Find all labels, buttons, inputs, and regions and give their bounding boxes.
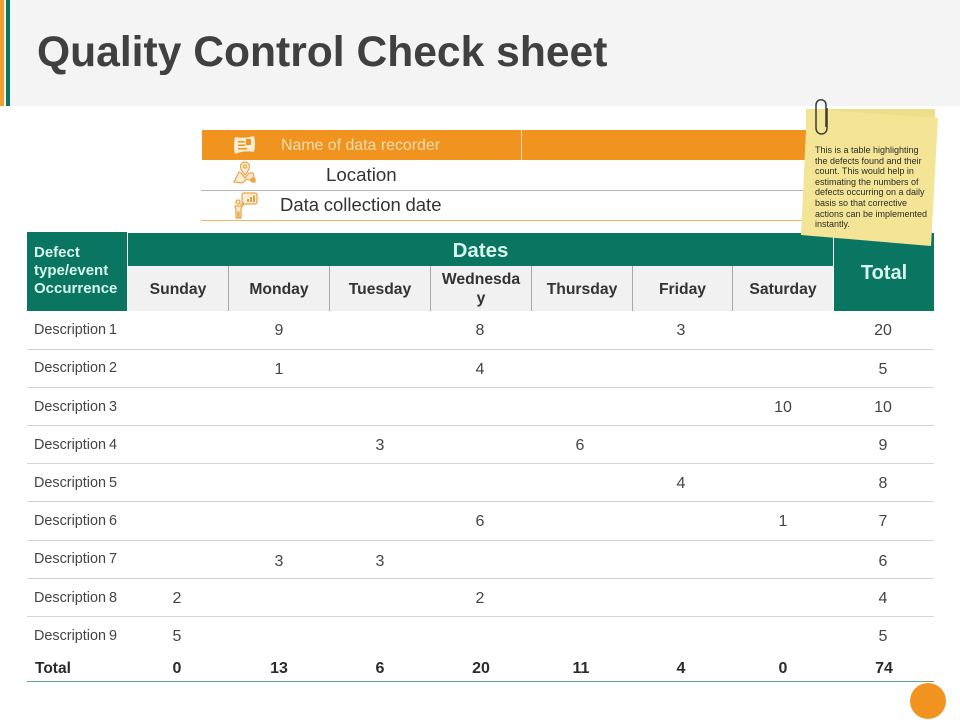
page number circle	[910, 683, 946, 719]
day: tuesday	[330, 266, 431, 311]
accent bar: green	[6, 0, 10, 106]
day: wednesday	[431, 266, 532, 311]
row 9: 5	[879, 628, 887, 645]
accent bar: orange	[0, 0, 4, 106]
bottom line	[201, 220, 841, 221]
header cell: dates	[128, 233, 833, 266]
row 7: 3	[275, 553, 283, 570]
totals row: 0	[173, 660, 181, 677]
totals row: 4	[677, 660, 685, 677]
row 5	[34, 475, 887, 492]
row 8: 4	[879, 590, 887, 607]
orange row	[202, 130, 841, 160]
row 2: Description 2	[34, 360, 117, 376]
day: wednesday: Wednesda	[442, 271, 520, 288]
header cell: dates: Dates	[453, 239, 508, 262]
header band	[0, 0, 960, 106]
row 3: 10	[774, 399, 792, 416]
icon: paperclip	[815, 99, 828, 135]
icon: presenter	[234, 192, 258, 219]
row 8: 2	[173, 590, 181, 607]
row 3: Description 3	[34, 399, 117, 415]
row 3: 10	[874, 399, 892, 416]
day: sunday: Sunday	[150, 281, 206, 298]
icon: map pin	[233, 161, 256, 184]
row 1: 9	[275, 322, 283, 339]
totals row: 6	[376, 660, 384, 677]
row 4	[34, 437, 887, 454]
row 4: 3	[376, 437, 384, 454]
day: saturday	[733, 266, 833, 311]
header cell: defect type: Occurrence	[34, 280, 117, 297]
row 7: Description 7	[34, 551, 117, 567]
row 6: 6	[476, 513, 484, 530]
note text: basis so that corrective	[815, 198, 907, 208]
row 8: Description 8	[34, 590, 117, 606]
totals row: 13	[270, 660, 288, 677]
row divider	[521, 130, 522, 160]
row 1: 3	[677, 322, 685, 339]
row 1	[34, 322, 892, 339]
label: location: Location	[326, 164, 397, 185]
title: Quality Control Check sheet	[37, 28, 607, 76]
header cell: defect type	[27, 232, 127, 311]
day: sunday	[128, 266, 229, 311]
row 6: 7	[879, 513, 887, 530]
day: monday	[229, 266, 330, 311]
row 6: Description 6	[34, 513, 117, 529]
row 9: 5	[173, 628, 181, 645]
row 4: 9	[879, 437, 887, 454]
day: thursday	[532, 266, 633, 311]
day: tuesday: Tuesday	[349, 281, 411, 298]
label: data collection date: Data collection date	[280, 194, 442, 215]
totals row: 0	[779, 660, 787, 677]
day: saturday: Saturday	[749, 281, 817, 298]
note text: the defects found and their	[815, 156, 922, 166]
row 4: 6	[576, 437, 584, 454]
totals row: 20	[472, 660, 490, 677]
row 7: 3	[376, 553, 384, 570]
day: thursday: Thursday	[547, 281, 617, 298]
header cell: total	[834, 233, 934, 311]
note back sheet	[801, 109, 938, 246]
row 9: Description 9	[34, 628, 117, 644]
row 5: 4	[677, 475, 685, 492]
row 7: 6	[879, 553, 887, 570]
row 6: 1	[779, 513, 787, 530]
sticky note	[801, 99, 938, 246]
header cell: total: Total	[861, 262, 907, 284]
row 5: Description 5	[34, 475, 117, 491]
note text: instantly.	[815, 219, 850, 229]
row 2: 5	[879, 361, 887, 378]
row 7	[34, 551, 887, 570]
row 2	[34, 360, 887, 378]
row 2: 4	[476, 361, 484, 378]
row 3	[34, 399, 892, 416]
note text: count. This would help in	[815, 166, 914, 176]
totals row: 74	[875, 660, 893, 677]
header cell: defect type: type/event	[34, 262, 108, 279]
note text	[815, 145, 927, 229]
row 1: 8	[476, 322, 484, 339]
note text: estimating the numbers of	[815, 177, 919, 187]
icon: id card	[234, 136, 255, 154]
row 8: 2	[476, 590, 484, 607]
note text: actions can be implemented	[815, 209, 927, 219]
totals row: 11	[573, 660, 589, 677]
day: friday	[633, 266, 733, 311]
row 4: Description 4	[34, 437, 117, 453]
label: name of data recorder: Name of data recorder	[281, 137, 440, 154]
day: friday: Friday	[659, 281, 706, 298]
note text: This is a table highlighting	[815, 145, 919, 155]
panel: recorder info	[201, 130, 806, 221]
row 1: 20	[874, 322, 892, 339]
row 1: Description 1	[34, 322, 117, 338]
row line	[201, 190, 841, 191]
row 8	[34, 590, 887, 607]
row 2: 1	[275, 361, 283, 378]
header cell: defect type: Defect	[34, 244, 80, 261]
row 5: 8	[879, 475, 887, 492]
row 9	[34, 628, 887, 645]
totals row: Total	[35, 660, 71, 677]
row 6	[34, 513, 887, 530]
note text: defects occurring on a daily	[815, 187, 925, 197]
day: wednesday: y	[477, 290, 485, 307]
day: monday: Monday	[249, 281, 309, 298]
